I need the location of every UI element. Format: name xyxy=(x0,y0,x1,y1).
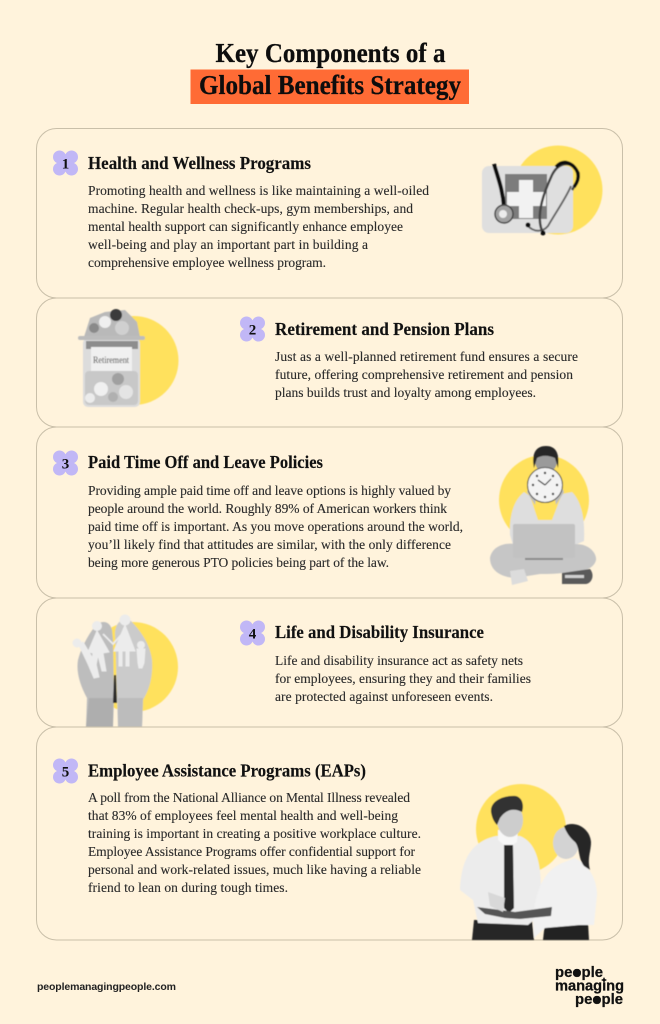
body text 1: machine. Regular health check-ups, gym memberships, and xyxy=(88,201,413,216)
body text 3: you’ll likely find that attitudes are similar, with the only difference xyxy=(88,537,451,552)
footer website: peoplemanagingpeople.com xyxy=(37,981,176,993)
heading 3: Paid Time Off and Leave Policies xyxy=(88,452,323,472)
body text 2 xyxy=(275,349,578,400)
logo: people xyxy=(575,991,623,1008)
title xyxy=(190,38,469,104)
body text 1: mental health support can significantly enhance employee xyxy=(88,219,403,234)
body text 1 xyxy=(88,183,429,270)
body text 1: well-being and play an important part in building a xyxy=(88,237,368,252)
body text 2: plans builds trust and loyalty among employees. xyxy=(275,385,536,400)
body text 4: Life and disability insurance act as safety nets xyxy=(275,653,523,668)
body text 5: Employee Assistance Programs offer confidential support for xyxy=(88,844,416,859)
panel: life and disability insurance xyxy=(36,598,622,727)
badge 1 xyxy=(53,150,78,176)
body text 1: Promoting health and wellness is like maintaining a well-oiled xyxy=(88,183,429,198)
body text 3: paid time off is important. As you move operations around the world, xyxy=(88,519,463,534)
title: Key Components of a xyxy=(216,38,446,68)
body text 5 xyxy=(88,790,421,895)
body text 3: Providing ample paid time off and leave options is highly valued by xyxy=(88,483,451,498)
title highlight: Global Benefits Strategy xyxy=(199,70,461,100)
badge 3: 3 xyxy=(62,456,69,472)
badge 3 xyxy=(53,450,78,476)
icon: hands holding paper family xyxy=(73,615,178,727)
panel: paid time off and leave policies xyxy=(36,427,622,598)
body text 5: personal and work-related issues, much like having a reliable xyxy=(88,862,421,877)
body text 3 xyxy=(88,483,463,570)
panel: health and wellness programs xyxy=(36,128,622,298)
heading 5: Employee Assistance Programs (EAPs) xyxy=(88,760,366,782)
body text 5: that 83% of employees feel mental health and well-being xyxy=(88,808,398,823)
heading 1: Health and Wellness Programs xyxy=(88,153,311,173)
icon: first aid kit and stethoscope xyxy=(482,146,602,236)
body text 5: training is important in creating a positive workplace culture. xyxy=(88,826,421,841)
body text 2: Just as a well-planned retirement fund ensures a secure xyxy=(275,349,578,364)
body text 4: for employees, ensuring they and their families xyxy=(275,671,531,686)
body text 3: people around the world. Roughly 89% of American workers think xyxy=(88,501,447,516)
badge 2: 2 xyxy=(249,322,256,338)
badge 2 xyxy=(240,316,265,342)
body text 5: A poll from the National Alliance on Mental Illness revealed xyxy=(88,790,410,805)
badge 4: 4 xyxy=(249,626,257,642)
badge 5 xyxy=(53,758,78,784)
logo: managing xyxy=(555,978,624,994)
body text 4 xyxy=(275,653,531,704)
panel: employee assistance programs xyxy=(36,727,622,940)
icon: retirement coin jar: Retirement xyxy=(93,356,129,366)
body text 1: comprehensive employee wellness program. xyxy=(88,255,326,270)
badge 1: 1 xyxy=(62,156,69,172)
body text 4: are protected against unforeseen events. xyxy=(275,689,493,704)
body text 3: being more generous PTO policies being part of the law. xyxy=(88,555,389,570)
icon: two colleagues reading a book xyxy=(460,784,597,940)
badge 4 xyxy=(240,620,265,646)
logo: people xyxy=(555,964,603,981)
body text 2: future, offering comprehensive retirement and pension xyxy=(275,367,573,382)
icon: man with clock and laptop xyxy=(490,446,596,585)
badge 5: 5 xyxy=(62,764,69,780)
logo xyxy=(555,964,624,1008)
heading 4: Life and Disability Insurance xyxy=(275,622,484,642)
body text 5: friend to lean on during tough times. xyxy=(88,880,288,895)
heading 2: Retirement and Pension Plans xyxy=(275,319,494,339)
icon: retirement coin jar xyxy=(78,309,178,407)
panel: retirement and pension plans xyxy=(36,298,622,427)
